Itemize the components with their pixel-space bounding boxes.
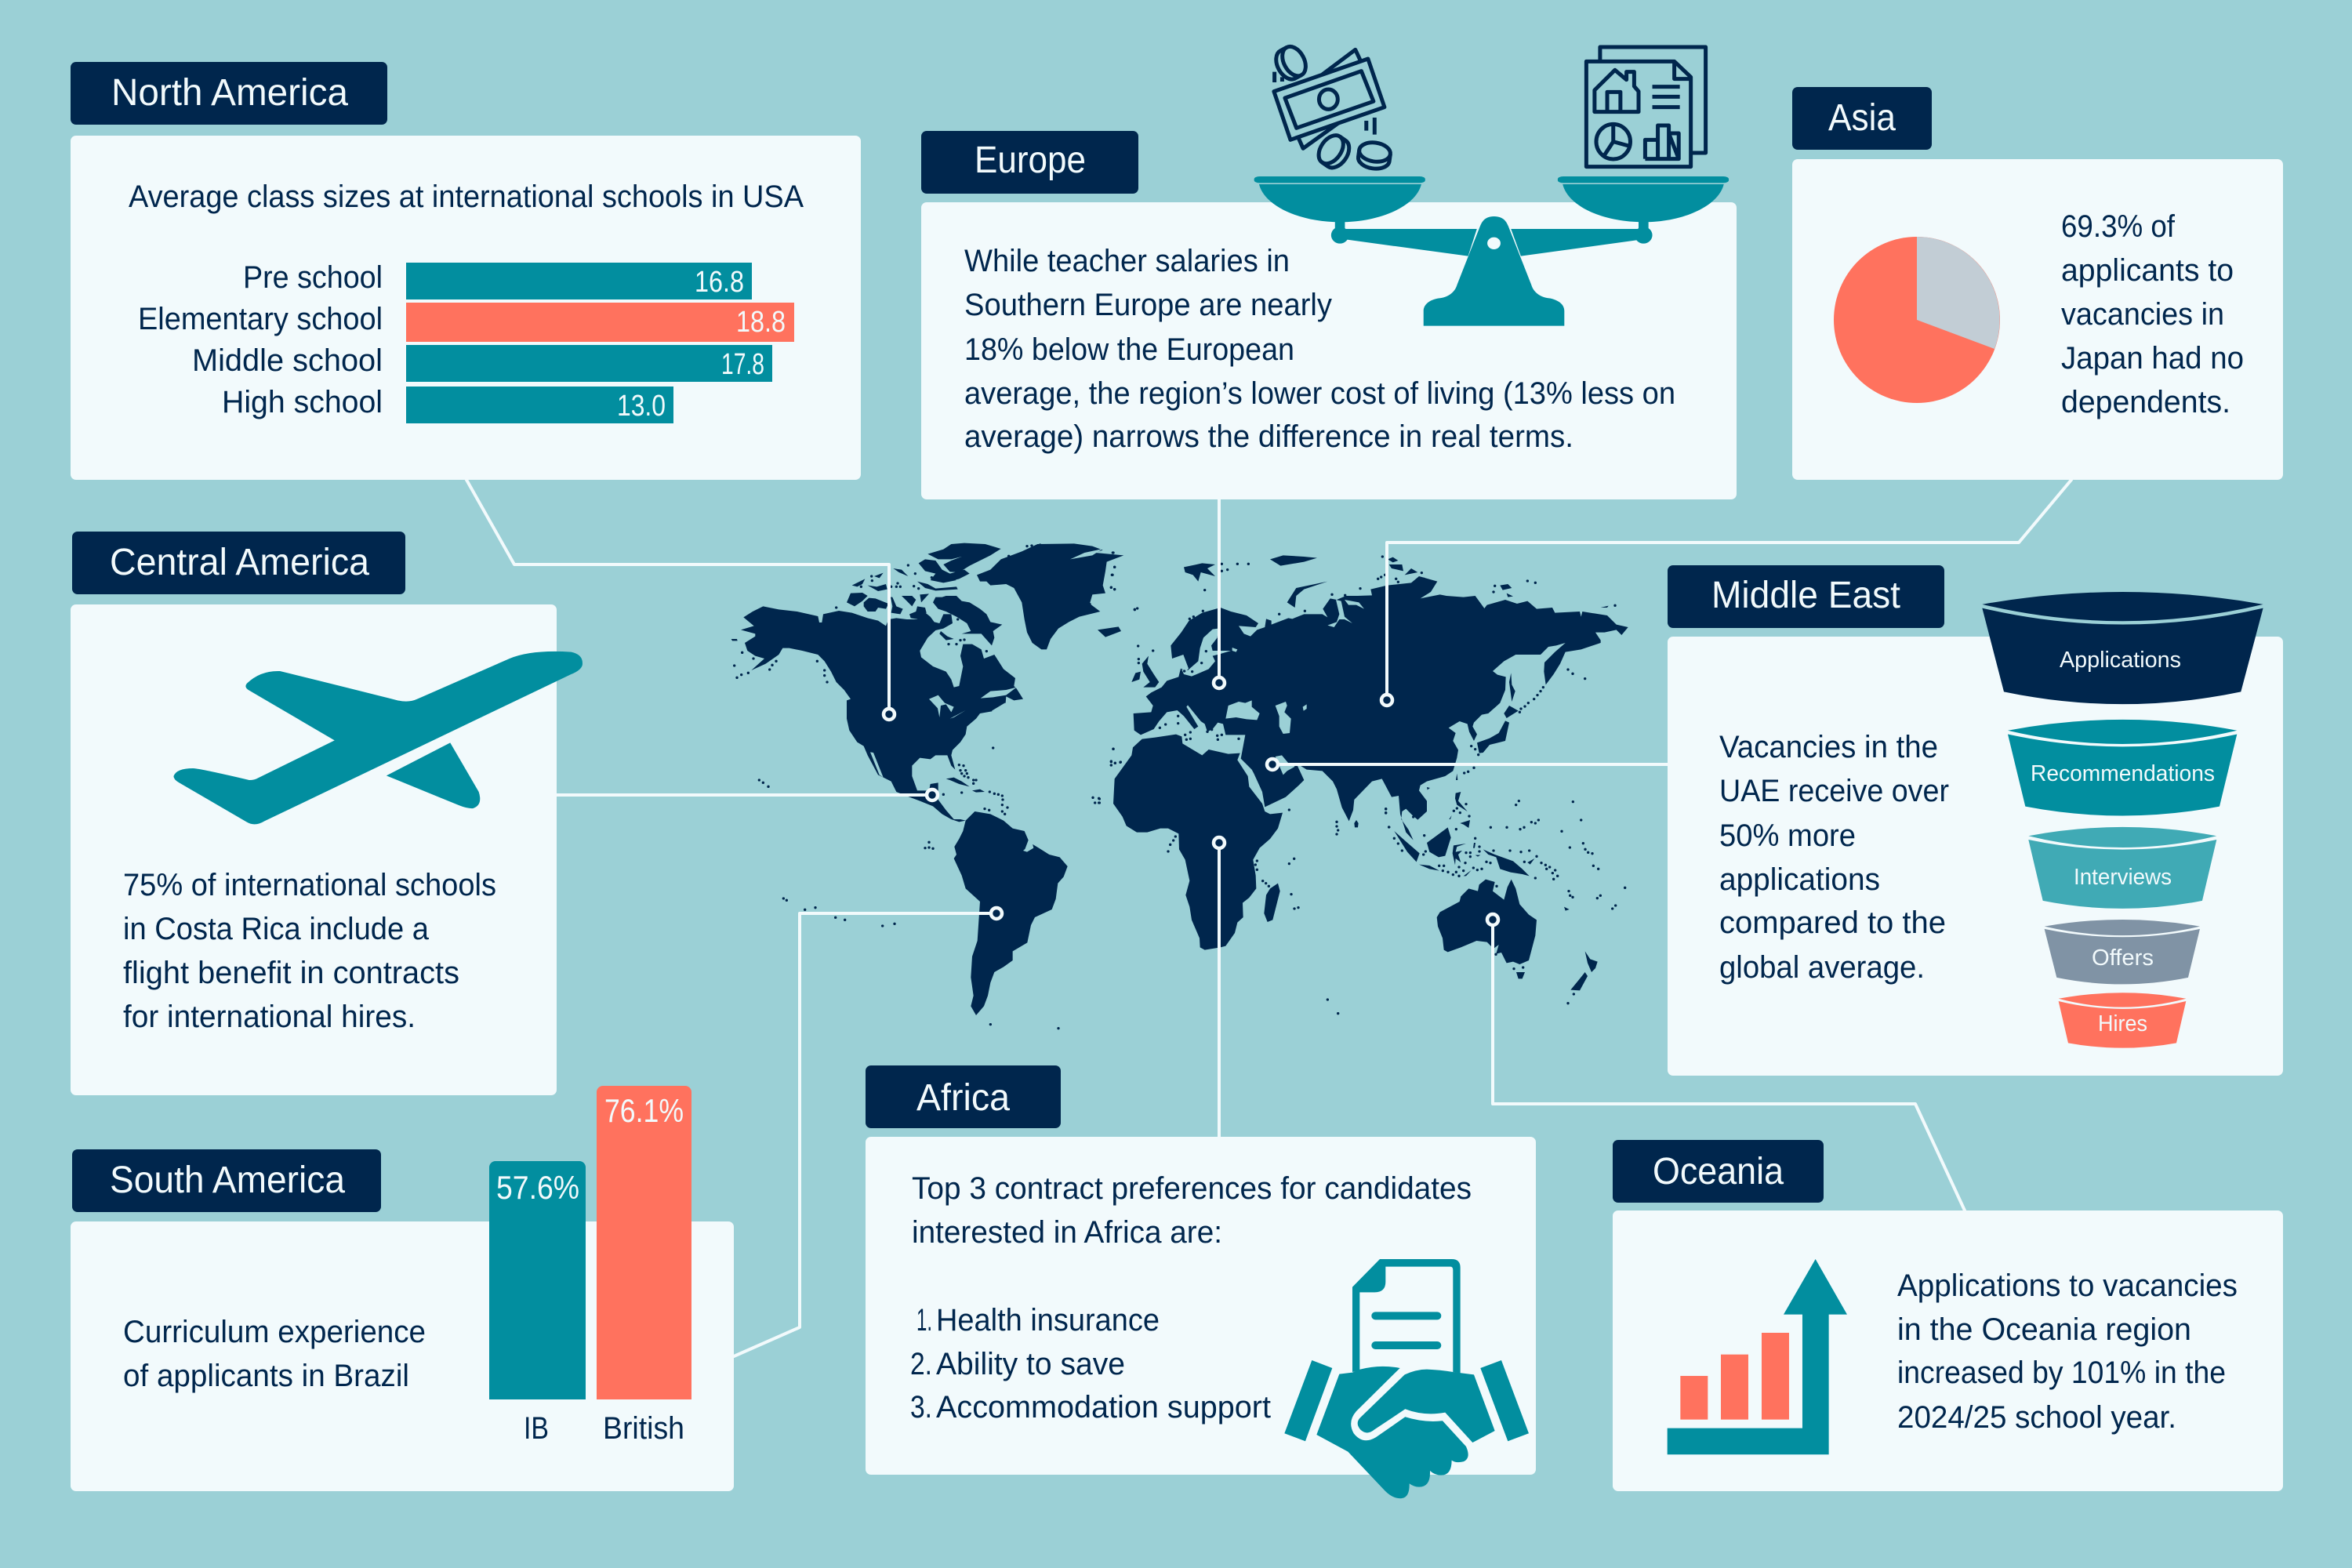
text: applications increase: 2024/25 school year. — [1897, 1400, 2176, 1435]
bar chart: class sizes: Elementary school — [138, 302, 383, 336]
text: contract preferences: 2. — [910, 1347, 932, 1381]
text: dependents: vacancies in — [2061, 297, 2224, 332]
icon: rising bars and arrow — [1668, 1259, 1847, 1454]
panel: North America — [71, 62, 861, 480]
text: curriculum experience: of applicants in Brazil — [123, 1359, 409, 1393]
heading: Asia: Asia — [1828, 97, 1896, 139]
funnel chart — [1982, 592, 2263, 1048]
lakes and straits — [870, 549, 1103, 852]
panel: Central America — [71, 532, 583, 1095]
bar chart: class sizes: 16.8 — [695, 266, 744, 299]
text: flight benefit: for international hires. — [123, 1000, 416, 1034]
heading: Central America: Central America — [110, 542, 369, 583]
text: teacher salaries — [964, 244, 1675, 454]
funnel chart: Hires — [2098, 1011, 2147, 1036]
small islands — [1099, 553, 1615, 1000]
chart title: Average class sizes at international schools in USA — [129, 180, 804, 214]
text: flight benefit: flight benefit in contracts — [123, 956, 459, 990]
text: dependents: Japan had no — [2061, 341, 2244, 376]
card: Central America — [71, 604, 557, 1095]
text: contract preferences: 3. — [910, 1390, 932, 1425]
inland seas — [1181, 600, 1364, 775]
bar chart: class sizes: 18.8 — [736, 306, 786, 339]
funnel chart: Applications — [2060, 648, 2181, 673]
bar chart: class sizes: High school — [222, 385, 383, 419]
bar chart: class sizes: Middle school — [192, 343, 383, 378]
panel: Africa — [866, 1065, 1536, 1498]
map location markers — [884, 677, 1498, 925]
text: dependents: dependents. — [2061, 385, 2230, 419]
Americas and Greenland — [731, 543, 1134, 1029]
heading: South America: South America — [110, 1160, 345, 1201]
icon: airplane — [173, 652, 583, 824]
text: applications increase: increased by 101% in the — [1897, 1356, 2226, 1390]
text: contract preferences — [910, 1171, 1472, 1425]
Eurasia and Africa — [1099, 553, 1628, 1000]
card: Oceania — [1613, 1210, 2283, 1491]
text: UAE vacancies: 50% more — [1719, 818, 1856, 853]
text: UAE vacancies: applications — [1719, 862, 1880, 897]
funnel chart: Interviews — [2074, 865, 2172, 890]
bar chart: curriculum: IB — [524, 1411, 549, 1446]
bar chart: curriculum: British — [603, 1411, 684, 1446]
text: applications increase — [1897, 1269, 2238, 1435]
heading: Middle East: Middle East — [1711, 575, 1900, 616]
text: contract preferences: 1. — [916, 1303, 932, 1338]
card: Europe — [921, 202, 1737, 499]
text: dependents: 69.3% of — [2061, 209, 2176, 244]
panel: Middle East — [1668, 565, 2283, 1076]
bar chart: curriculum: 57.6% — [496, 1169, 579, 1206]
text: curriculum experience: Curriculum experience — [123, 1315, 426, 1349]
heading: Africa: Africa — [916, 1077, 1010, 1119]
card: Asia — [1792, 159, 2283, 480]
world map — [731, 543, 1628, 1029]
heading: North America: North America — [111, 72, 348, 114]
pie chart: no dependents — [1834, 237, 2000, 403]
small islands — [1338, 801, 1625, 1014]
text: teacher salaries: average, the region’s lower cost of living (13% less on — [964, 376, 1675, 411]
text: contract preferences: Health insurance — [936, 1303, 1160, 1338]
text: teacher salaries: Southern Europe are nearly — [964, 288, 1332, 322]
funnel chart: Offers — [2092, 946, 2154, 971]
text: teacher salaries: average) narrows the difference in real terms. — [964, 419, 1573, 454]
small islands — [735, 545, 1134, 1029]
panel: Europe — [921, 42, 1737, 499]
text: dependents — [2061, 209, 2244, 419]
heading: Europe: Europe — [975, 140, 1086, 181]
bar chart: curriculum — [489, 1086, 691, 1446]
heading: Middle East — [1668, 565, 1944, 628]
card: Middle East — [1668, 637, 2283, 1076]
text: UAE vacancies: UAE receive over — [1719, 774, 1949, 808]
icon: balance scale — [1254, 176, 1729, 326]
text: teacher salaries: While teacher salaries in — [964, 244, 1290, 278]
text: UAE vacancies: global average. — [1719, 950, 1925, 985]
bar chart: curriculum: 76.1% — [604, 1092, 684, 1129]
heading: Africa — [866, 1065, 1061, 1128]
text: flight benefit: 75% of international schools — [123, 868, 496, 902]
heading: Central America — [72, 532, 405, 594]
text: dependents: applicants to — [2061, 253, 2234, 288]
text: teacher salaries: 18% below the European — [964, 332, 1294, 367]
text: UAE vacancies: Vacancies in the — [1719, 730, 1938, 764]
bar chart: class sizes: Pre school — [243, 260, 383, 295]
islands of Europe and Asia — [1131, 555, 1609, 922]
card: South America — [71, 1221, 734, 1491]
text: flight benefit: in Costa Rica include a — [123, 912, 430, 946]
icon: money and coins — [1272, 42, 1392, 172]
heading: Asia — [1792, 87, 1932, 150]
bar chart: class sizes: 13.0 — [617, 390, 666, 423]
heading: North America — [71, 62, 387, 125]
card: Africa — [866, 1137, 1536, 1475]
text: contract preferences: Accommodation support — [936, 1390, 1271, 1425]
panel: Oceania — [1613, 1140, 2283, 1491]
text: applications increase: in the Oceania region — [1897, 1312, 2191, 1347]
heading: Oceania: Oceania — [1653, 1151, 1784, 1192]
connector lines — [466, 480, 2071, 1356]
bar chart: class sizes: 17.8 — [721, 348, 764, 381]
text: UAE vacancies: compared to the — [1719, 906, 1946, 940]
text: contract preferences: Top 3 contract preferences for candidates — [912, 1171, 1472, 1206]
icon: contract handshake — [1284, 1259, 1529, 1498]
text: UAE vacancies — [1719, 730, 1949, 985]
heading: Oceania — [1613, 1140, 1824, 1203]
bar chart: class sizes — [138, 260, 794, 423]
text: applications increase: Applications to vacancies — [1897, 1269, 2238, 1303]
icon: report document — [1586, 47, 1706, 167]
card: North America — [71, 136, 861, 480]
text: flight benefit — [123, 868, 496, 1034]
panel: Asia — [1792, 87, 2283, 480]
Southeast Asia and Oceania — [1338, 792, 1625, 1014]
heading: South America — [72, 1149, 381, 1212]
panel: South America — [71, 1086, 734, 1491]
text: contract preferences: interested in Africa are: — [912, 1215, 1222, 1250]
text: curriculum experience — [123, 1315, 426, 1393]
text: contract preferences: Ability to save — [936, 1347, 1125, 1381]
heading: Europe — [921, 131, 1138, 194]
funnel chart: Recommendations — [2031, 761, 2215, 786]
